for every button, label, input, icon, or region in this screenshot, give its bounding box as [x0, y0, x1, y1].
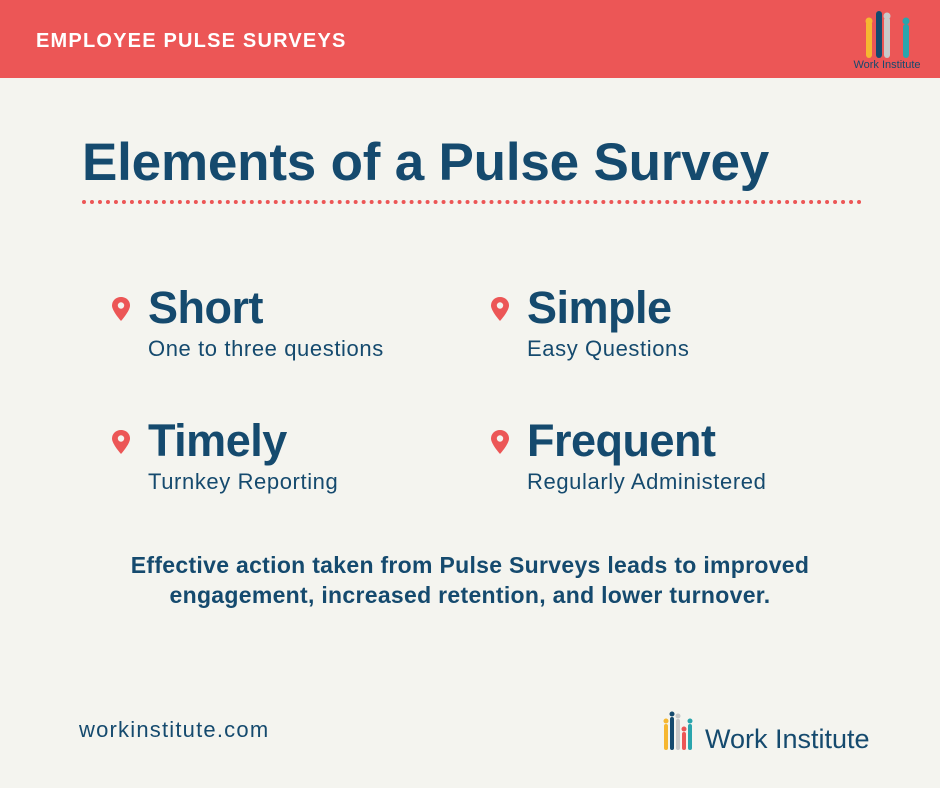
item: Timely: Turnkey Reporting — [148, 469, 338, 494]
icon: pin — [112, 430, 130, 454]
website: workinstitute.com — [79, 717, 269, 742]
dotted divider — [82, 200, 862, 204]
item: Short: Short — [148, 282, 263, 333]
item: Frequent: Frequent — [527, 415, 716, 466]
item: Frequent — [491, 415, 766, 494]
item: Simple — [491, 282, 689, 361]
icon: pin — [491, 430, 509, 454]
item: Simple: Easy Questions — [527, 336, 689, 361]
item: Frequent: Regularly Administered — [527, 469, 766, 494]
footer logo — [664, 712, 870, 754]
item: Short: One to three questions — [148, 336, 384, 361]
icon: pin — [491, 297, 509, 321]
item: Timely — [112, 415, 338, 494]
title: Elements of a Pulse Survey — [82, 133, 769, 192]
icon: header logo: Work Institute — [853, 59, 921, 71]
header bar — [0, 0, 940, 78]
item: Short — [112, 282, 384, 361]
summary text: Effective action taken from Pulse Surveys leads to improved — [131, 552, 809, 578]
summary text: engagement, increased retention, and lower turnover. — [170, 582, 770, 608]
footer logo: Work Institute — [705, 724, 870, 754]
summary text — [131, 552, 809, 608]
item: Simple: Simple — [527, 282, 672, 333]
item: Timely: Timely — [148, 415, 287, 466]
icon: header logo — [853, 11, 921, 71]
icon: pin — [112, 297, 130, 321]
header label: EMPLOYEE PULSE SURVEYS — [36, 30, 347, 52]
